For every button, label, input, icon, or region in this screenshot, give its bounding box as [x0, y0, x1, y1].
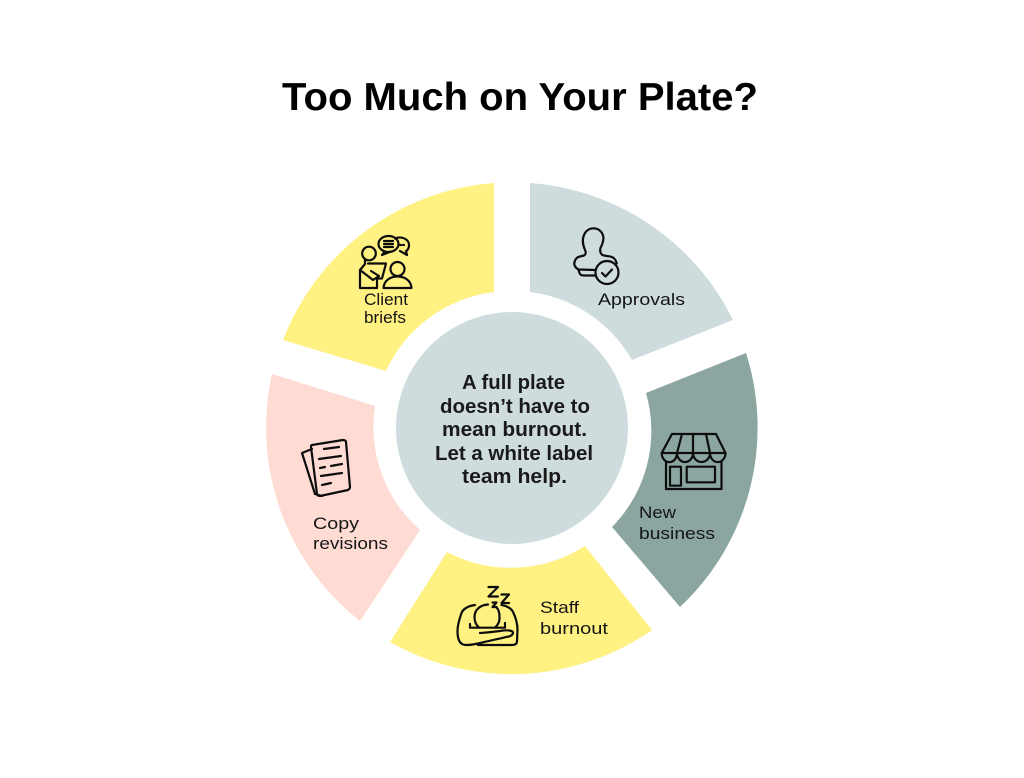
center circle: [396, 312, 628, 544]
label: new business: New: [639, 503, 677, 522]
panel: staff burnout: [390, 546, 652, 674]
label: approvals: Approvals: [598, 290, 685, 309]
icon: approvals stamp: [574, 228, 618, 284]
label: client briefs: briefs: [364, 308, 406, 327]
icon: client briefs: [360, 236, 412, 288]
panel: new business: [612, 353, 758, 607]
center message: A full plate: [462, 372, 565, 394]
panel: client briefs: [283, 183, 494, 371]
panel: approvals: [530, 183, 733, 360]
panel: copy revisions: [266, 374, 420, 621]
icon: sleeping person: [458, 587, 518, 645]
icon: storefront: [662, 434, 726, 489]
center message: mean burnout.: [442, 419, 587, 441]
center message: team help.: [462, 466, 567, 488]
center message: doesn’t have to: [440, 396, 590, 418]
label: staff burnout: Staff: [540, 598, 579, 617]
label: copy revisions: Copy: [313, 514, 360, 533]
label: new business: business: [639, 524, 715, 543]
label: client briefs: Client: [364, 290, 408, 309]
center message: Let a white label: [435, 443, 593, 465]
label: copy revisions: revisions: [313, 534, 388, 553]
icon: documents: [302, 440, 350, 496]
label: staff burnout: burnout: [540, 619, 608, 638]
title: Too Much on Your Plate?: [282, 76, 758, 119]
